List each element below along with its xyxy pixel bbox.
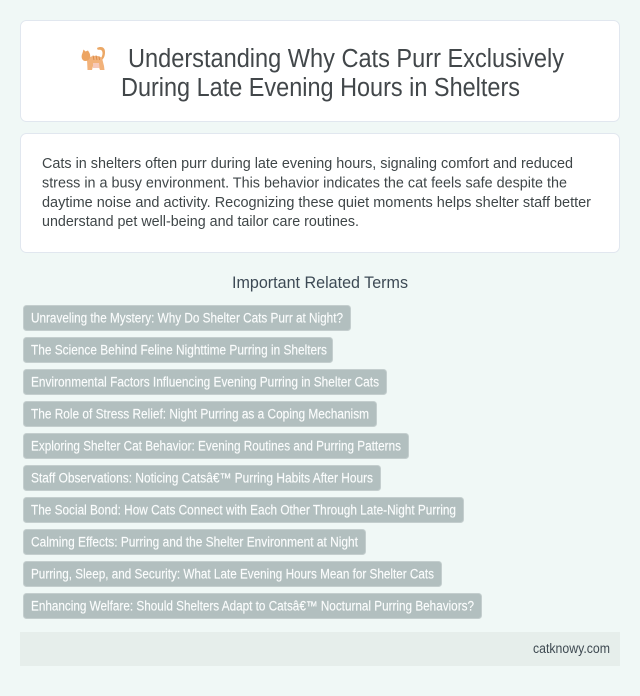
title: During Late Evening Hours in Shelters <box>121 74 520 102</box>
tag 7: The Social Bond: How Cats Connect with Each Other Through Late-Night Purring <box>31 502 456 518</box>
tag 6 <box>24 466 380 490</box>
tag 3: Environmental Factors Influencing Evening Purring in Shelter Cats <box>31 374 379 390</box>
footer <box>20 632 620 666</box>
panel: description <box>20 134 620 252</box>
tag 1 <box>24 306 350 330</box>
header panel <box>20 20 620 122</box>
tag 5 <box>24 434 408 458</box>
text block: description <box>42 155 591 230</box>
title <box>121 45 564 102</box>
tag 4 <box>24 402 376 426</box>
tag 5: Exploring Shelter Cat Behavior: Evening Routines and Purring Patterns <box>31 438 401 454</box>
tag 2 <box>24 338 332 362</box>
tag 8 <box>24 530 366 554</box>
tag 8: Calming Effects: Purring and the Shelter Environment at Night <box>31 534 358 550</box>
tag 3 <box>24 370 386 394</box>
tag 6: Staff Observations: Noticing Catsâ€™ Purring Habits After Hours <box>31 470 373 486</box>
icon: cat <box>82 47 105 70</box>
tag 1: Unraveling the Mystery: Why Do Shelter Cats Purr at Night? <box>31 310 343 326</box>
text block: description: understand pet well-being and tailor care routines. <box>42 213 359 230</box>
heading: related terms: Important Related Terms <box>232 274 408 292</box>
text block: description: stress in a busy environment. This behavior indicates the cat feels safe despite the <box>42 174 567 192</box>
tag 9: Purring, Sleep, and Security: What Late Evening Hours Mean for Shelter Cats <box>31 566 434 582</box>
footer source: catknowy.com <box>533 641 610 656</box>
tag list <box>24 306 482 618</box>
tag 2: The Science Behind Feline Nighttime Purring in Shelters <box>31 342 327 358</box>
tag 4: The Role of Stress Relief: Night Purring as a Coping Mechanism <box>31 406 369 422</box>
text block: description: Cats in shelters often purr during late evening hours, signaling comfort and reduced <box>42 155 573 172</box>
tag 10: Enhancing Welfare: Should Shelters Adapt to Catsâ€™ Nocturnal Purring Behaviors? <box>31 598 474 614</box>
tag 9 <box>24 562 442 586</box>
tag 10 <box>24 594 482 618</box>
title: Understanding Why Cats Purr Exclusively <box>128 45 564 73</box>
tag 7 <box>24 498 464 522</box>
text block: description: daytime noise and activity. Recognizing these quiet moments helps shelter staff better <box>42 194 591 211</box>
